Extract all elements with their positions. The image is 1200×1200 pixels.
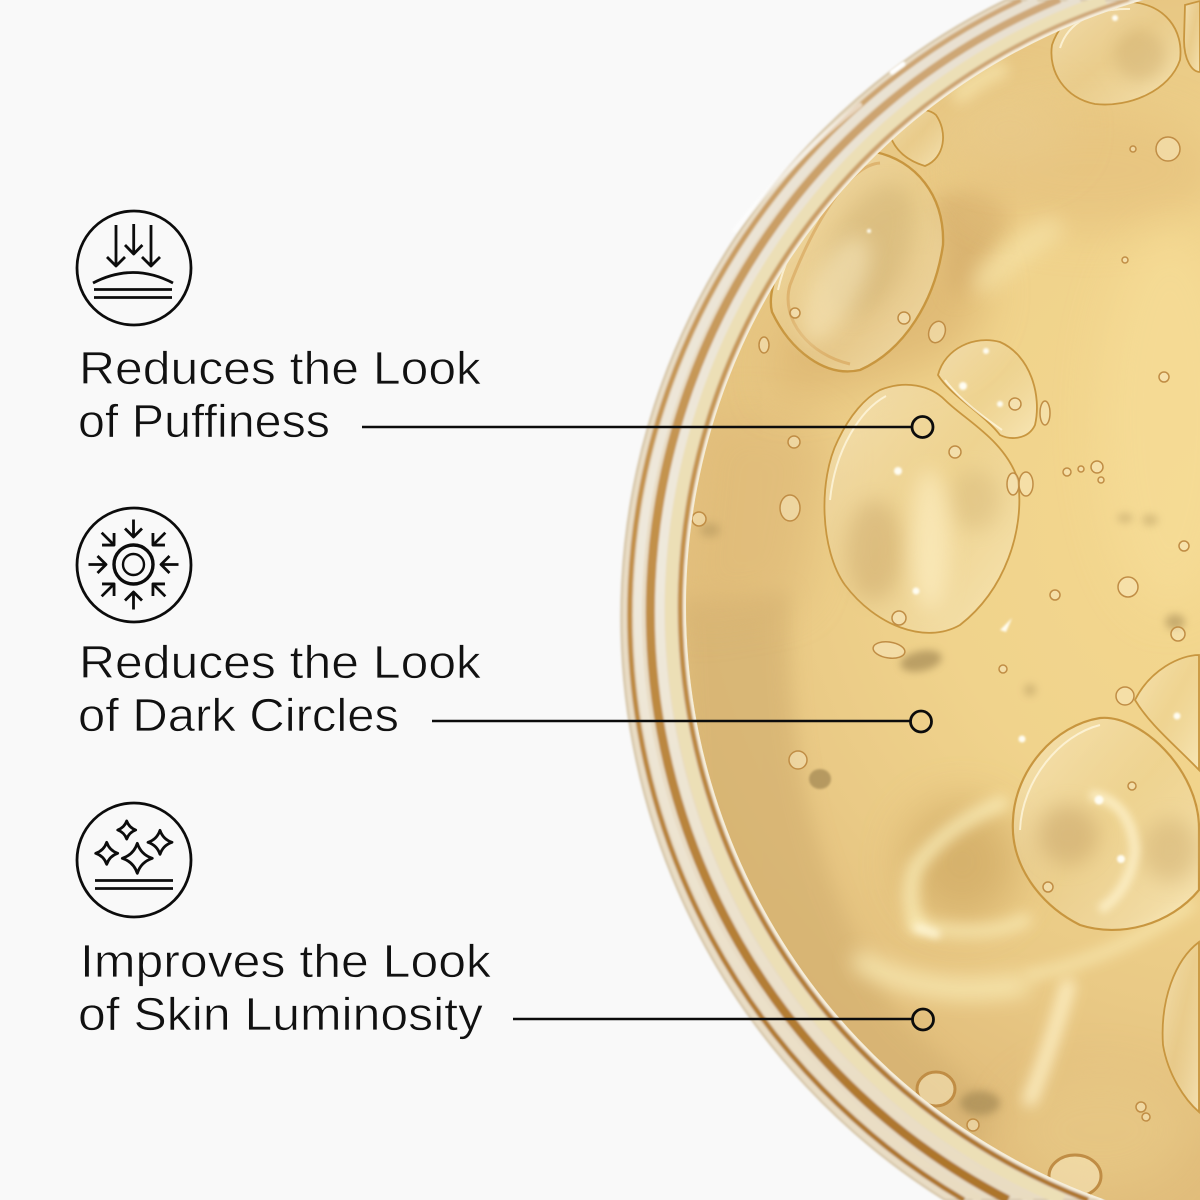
heading: skin luminosity: Improves the Look (80, 935, 492, 987)
gel surface (686, 0, 1200, 1200)
heading: puffiness: Reduces the Look (79, 342, 482, 394)
shadows (700, 513, 1185, 1115)
heading: dark circles: of Dark Circles (78, 689, 399, 741)
bubble centre large (824, 385, 1019, 633)
dish rim rings (621, 0, 1200, 1200)
rim glare (735, 64, 903, 230)
bubble bottom right (1163, 942, 1199, 1112)
heading: dark circles (78, 636, 482, 741)
item 1: reduces the look of puffiness (77, 211, 933, 447)
item 3: improves the look of skin luminosity (77, 803, 934, 1040)
heading: skin luminosity (78, 935, 492, 1040)
caustic highlights (862, 70, 1190, 1100)
item 2: reduces the look of dark circles (77, 508, 932, 741)
bubble top right (1051, 2, 1181, 105)
heading: dark circles: Reduces the Look (79, 636, 482, 688)
callout line: puffiness (362, 416, 933, 438)
heading: puffiness (78, 342, 482, 447)
bubble top far right (1184, 1, 1200, 72)
icon: arrows pressing on skin (77, 211, 191, 325)
photo: gel in glass dish (619, 0, 1200, 1200)
icon: sparkles over skin (77, 803, 191, 917)
callout line: dark circles (432, 711, 932, 732)
heading: puffiness: of Puffiness (78, 395, 330, 447)
gel tone variations (680, 90, 1200, 1200)
heading: skin luminosity: of Skin Luminosity (78, 988, 483, 1040)
bubble top small (888, 110, 943, 166)
bubble right (1135, 655, 1199, 770)
icon: sun with inward arrows (77, 508, 191, 622)
bubble lower right (1013, 718, 1199, 930)
specular highlights (867, 15, 1180, 863)
callout line: skin luminosity (513, 1009, 934, 1030)
bubble centre-right small (938, 340, 1037, 438)
large bubbles (771, 1, 1200, 1112)
bubble long left (771, 152, 943, 371)
small bubbles (692, 137, 1189, 1197)
